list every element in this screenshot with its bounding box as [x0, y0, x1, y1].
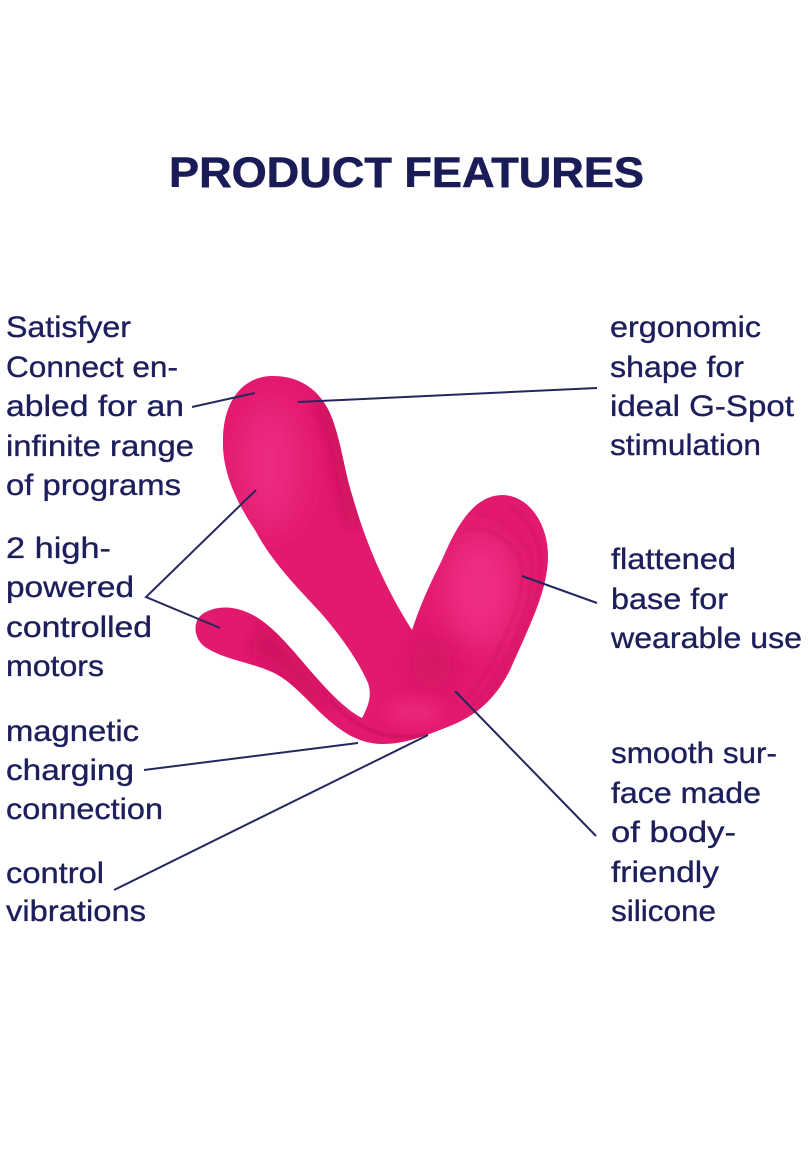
junction shadow [416, 646, 448, 684]
label: magnetic charging: connection [6, 793, 163, 826]
label: motors: motors [6, 650, 104, 683]
base lobe highlight [446, 534, 514, 646]
label: magnetic charging [6, 715, 163, 826]
label: ergonomic shape: ideal G-Spot [610, 390, 795, 423]
strap fold [330, 700, 425, 737]
small arm shadow [250, 622, 330, 708]
label: flattened base: base for [611, 583, 728, 616]
label: flattened base [610, 543, 802, 655]
label: ergonomic shape: shape for [610, 351, 744, 384]
label: smooth surface: silicone [611, 895, 716, 928]
label: motors: controlled [6, 611, 152, 644]
label: control vibrations: control [6, 857, 104, 890]
title: PRODUCT FEATURES [169, 149, 644, 197]
label: motors: powered [6, 571, 134, 604]
left labels [6, 311, 194, 928]
label: magnetic charging: magnetic [6, 715, 139, 748]
label: smooth surface [611, 737, 777, 928]
label: ergonomic shape [610, 311, 795, 462]
main lobe right shadow [318, 395, 360, 525]
leader lines [114, 388, 597, 890]
label: flattened base: flattened [611, 543, 736, 576]
label: ergonomic shape: stimulation [610, 429, 761, 462]
label: control vibrations: vibrations [6, 895, 146, 928]
label: Satisfyer Connect: Connect en- [6, 351, 178, 384]
label: control vibrations [6, 857, 146, 928]
label: Satisfyer Connect: infinite range [6, 430, 194, 463]
label: smooth surface: face made [611, 777, 761, 810]
label: flattened base: wearable use [610, 622, 802, 655]
label: Satisfyer Connect: of programs [6, 469, 181, 502]
label: Satisfyer Connect: abled for an [6, 390, 184, 423]
main lobe highlight [240, 400, 300, 530]
label: ergonomic shape: ergonomic [610, 311, 761, 344]
label: smooth surface: of body- [611, 816, 736, 849]
label: magnetic charging: charging [6, 754, 134, 787]
label: Satisfyer Connect [6, 311, 194, 502]
lower highlight [394, 701, 436, 722]
label: Satisfyer Connect: Satisfyer [6, 311, 131, 344]
right labels [610, 311, 802, 928]
label: smooth surface: smooth sur- [611, 737, 777, 770]
label: motors: 2 high- [6, 532, 111, 565]
label: smooth surface: friendly [611, 856, 719, 889]
label: motors [6, 532, 152, 683]
base rings [463, 505, 541, 712]
product illustration [196, 376, 548, 744]
